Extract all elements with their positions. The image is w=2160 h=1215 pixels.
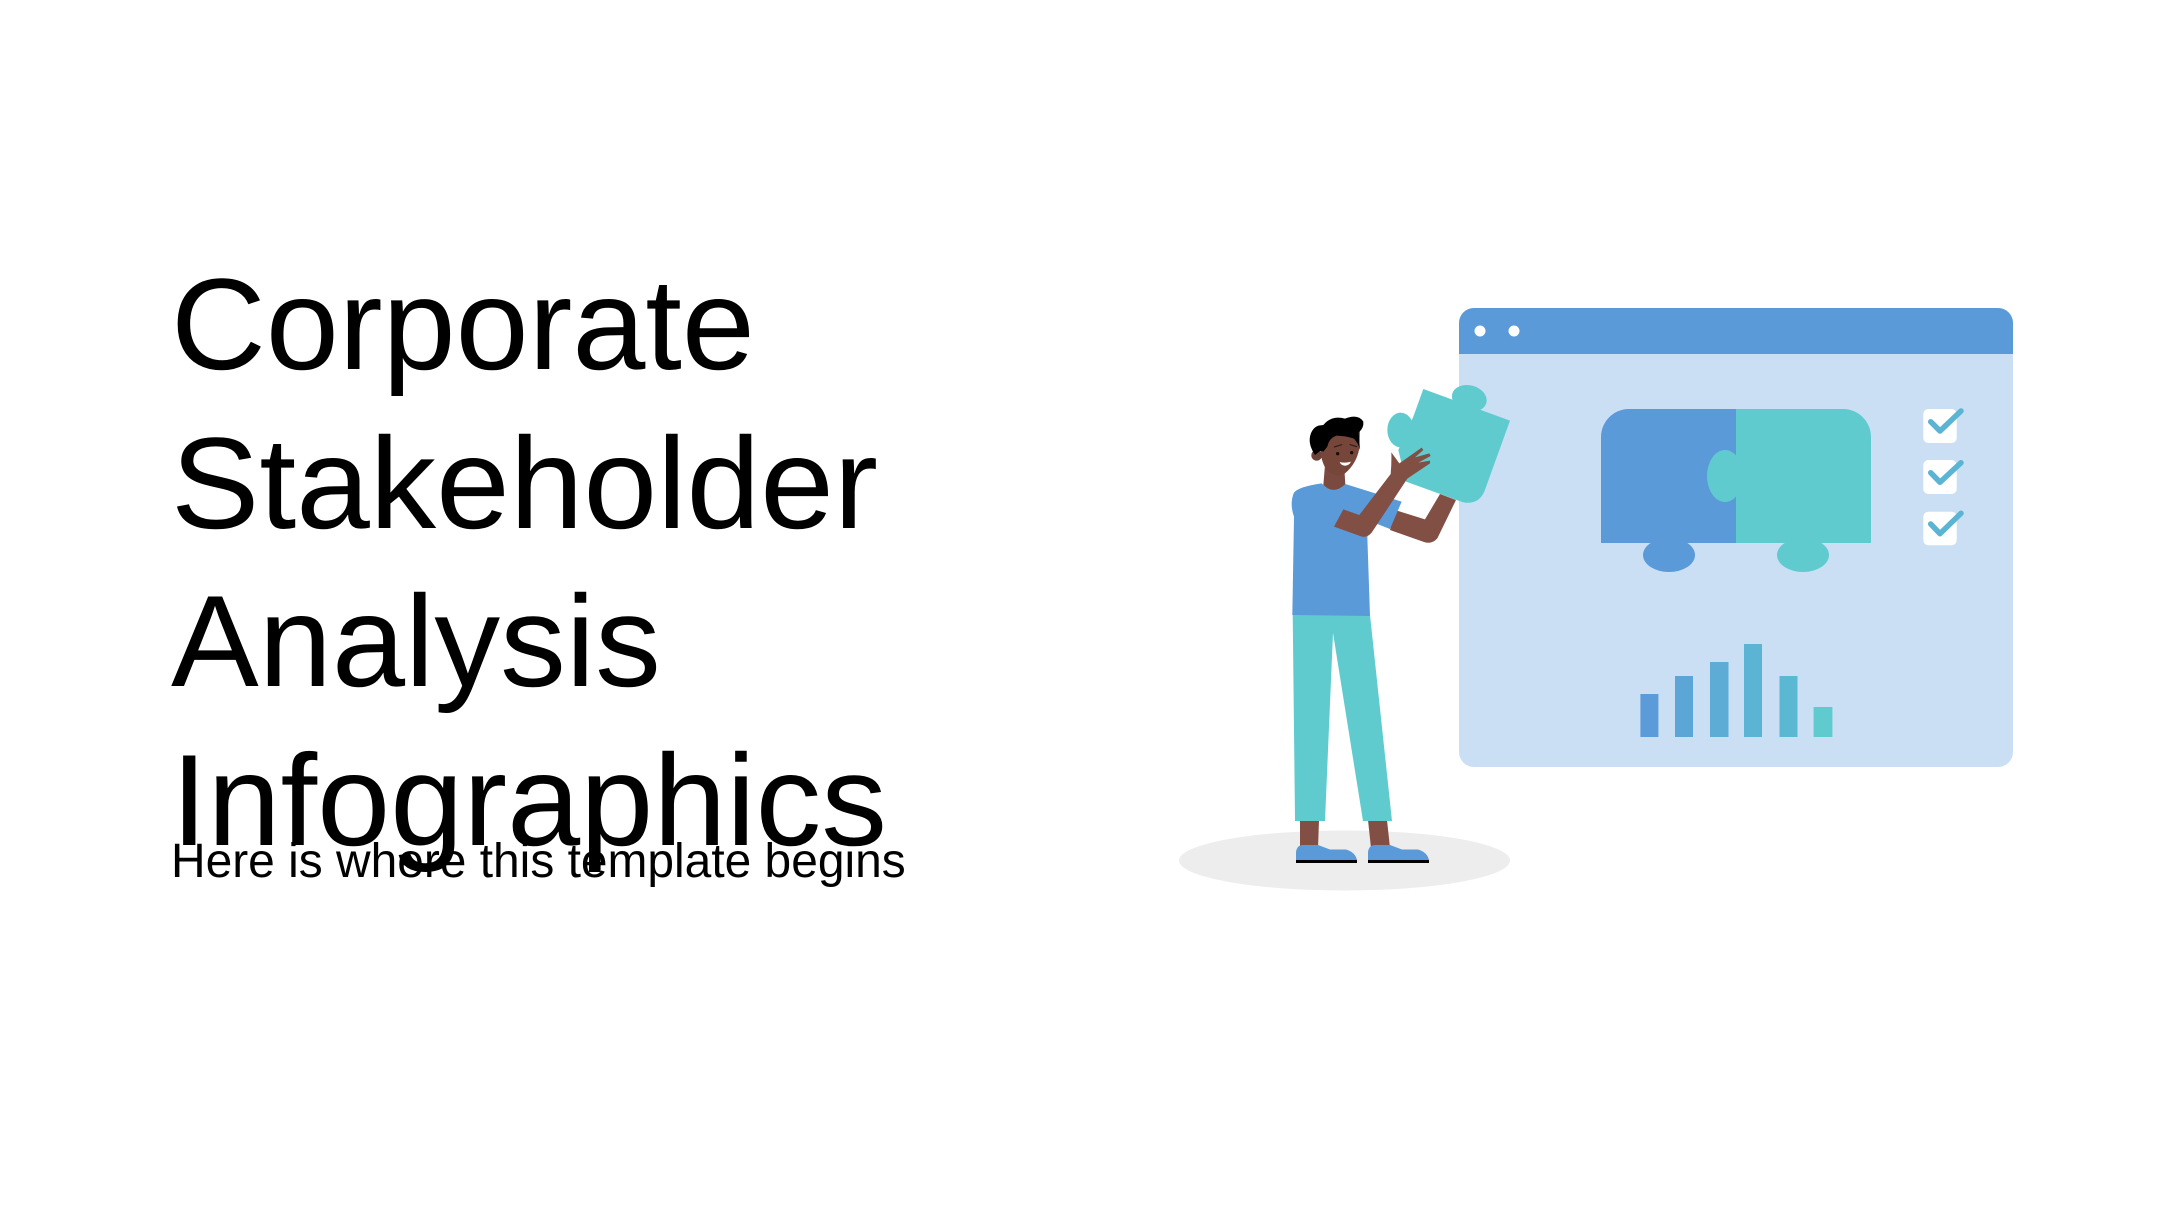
title: Corporate (171, 251, 755, 397)
near arm and hand (1334, 448, 1431, 537)
eyebrows (1334, 445, 1357, 447)
browser window (1459, 308, 2013, 767)
subtitle: Here is where this template begins (171, 835, 906, 888)
eyes (1336, 452, 1339, 455)
far arm (1390, 494, 1456, 543)
icon: joined puzzle pieces (1601, 409, 1871, 572)
head (1310, 417, 1363, 475)
shirt (1292, 483, 1402, 616)
window title bar (1459, 308, 2013, 354)
hair (1310, 417, 1363, 455)
window dots (1474, 326, 1520, 336)
title (171, 251, 887, 873)
smile (1340, 462, 1351, 466)
neck (1323, 465, 1345, 490)
shoes (1296, 845, 1429, 863)
bar chart (1640, 644, 1832, 737)
upper body, in zoom coordinates (1292, 381, 1510, 616)
legs (1300, 820, 1390, 848)
trousers (1293, 614, 1392, 821)
person (1292, 381, 1510, 863)
held puzzle piece (1387, 381, 1510, 503)
window body (1459, 308, 2013, 767)
title: Stakeholder (171, 410, 878, 556)
checklist (1923, 409, 1961, 545)
ground shadow (1179, 830, 1510, 890)
title: Infographics (171, 727, 887, 873)
title: Analysis (171, 568, 661, 714)
